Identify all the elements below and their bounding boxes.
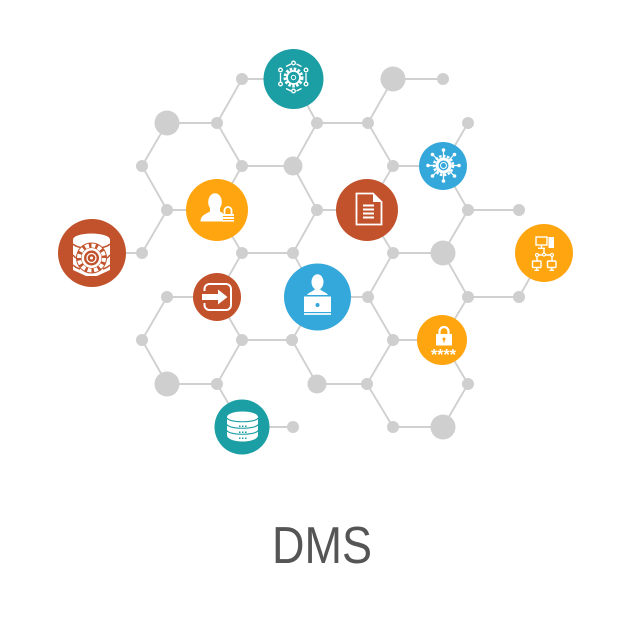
icon: computer network badge xyxy=(515,224,573,282)
hexagon network lines xyxy=(92,79,544,427)
icon: server database badge xyxy=(214,400,270,454)
icon: password lock badge: **** xyxy=(431,347,457,364)
network nodes xyxy=(136,66,525,440)
icon: gear network badge xyxy=(264,49,324,109)
icon: gear hub badge xyxy=(419,142,467,190)
icon: database gear badge xyxy=(58,219,126,287)
icon: laptop user badge xyxy=(284,264,351,330)
title: DMS xyxy=(272,517,372,575)
icon: password lock badge xyxy=(417,315,467,365)
icon: document badge xyxy=(336,179,398,241)
icon: exit door badge xyxy=(193,273,241,321)
icon: user lock badge xyxy=(186,179,248,241)
